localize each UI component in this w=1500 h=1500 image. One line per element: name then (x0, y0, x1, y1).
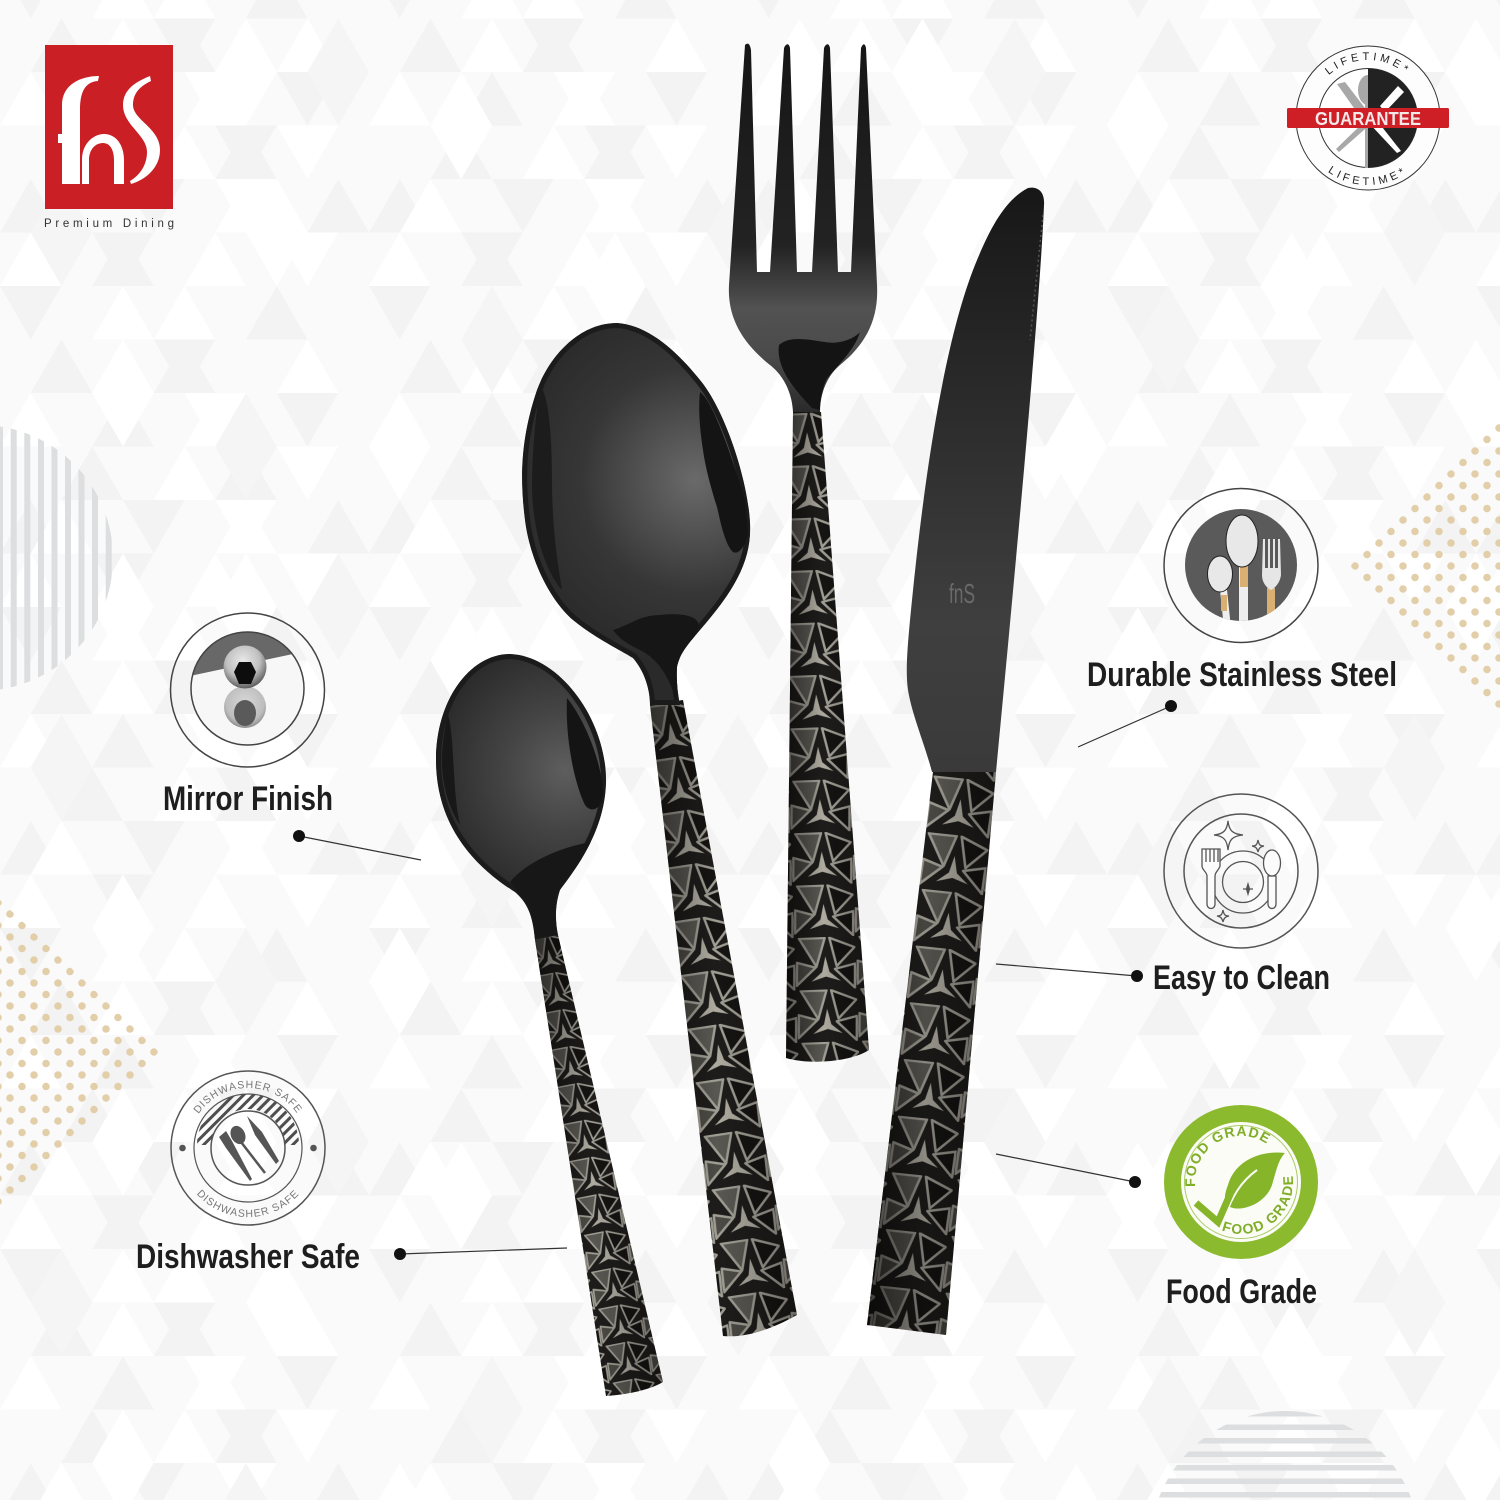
label: Durable Stainless Steel: Durable Stainless Steel (1087, 656, 1397, 694)
knife blade (907, 188, 1044, 772)
icon: food grade seal: FOOD GRADE (1222, 1176, 1294, 1234)
feature: food grade (996, 1105, 1318, 1311)
feature: mirror finish (163, 613, 421, 860)
decorative dots left (0, 900, 159, 1208)
fork (729, 44, 877, 1062)
leader line: mirror finish (293, 830, 421, 860)
small spoon bowl (436, 654, 606, 940)
badge: lifetime guarantee: LIFETIME* (1328, 166, 1402, 185)
icon: mirror ball (170, 613, 324, 767)
fork handle (786, 412, 869, 1062)
badge: lifetime guarantee: LIFETIME* (1324, 52, 1408, 75)
logo: FnS Premium Dining (44, 45, 174, 230)
icon: clean plate (1164, 794, 1318, 948)
feature: dishwasher safe (136, 1070, 567, 1276)
label: Easy to Clean: Easy to Clean (1153, 959, 1330, 997)
label: Food Grade: Food Grade (1166, 1273, 1317, 1311)
feature: easy to clean (996, 794, 1330, 997)
leader line: dishwasher safe (394, 1248, 567, 1260)
icon: dishwasher safe stamp (170, 1070, 326, 1226)
large spoon bowl (522, 323, 750, 705)
leader line: food grade (996, 1154, 1141, 1188)
icon: dishwasher safe stamp: DISHWASHER SAFE (193, 1080, 302, 1114)
badge: lifetime guarantee: GUARANTEE (1315, 108, 1421, 129)
leader line: durable (1078, 700, 1177, 747)
badge: lifetime guarantee (1287, 46, 1449, 190)
knife blade: fnS (949, 578, 975, 609)
knife (867, 188, 1044, 1335)
decorative stripes left (0, 420, 112, 700)
label: Mirror Finish: Mirror Finish (163, 780, 333, 818)
fork head (729, 44, 877, 412)
logo: FnS Premium Dining: Premium Dining (44, 218, 174, 230)
decorative dots right (1350, 422, 1500, 712)
feature: durable stainless steel (1078, 488, 1397, 747)
decorative stripes bottom (1150, 1411, 1420, 1498)
large spoon handle (650, 700, 797, 1336)
label: Dishwasher Safe: Dishwasher Safe (136, 1238, 360, 1276)
icon: food grade seal (1164, 1105, 1318, 1259)
knife handle (867, 772, 996, 1335)
icon: food grade seal: FOOD GRADE (1185, 1126, 1270, 1186)
leader line: easy to clean (996, 964, 1143, 982)
small spoon handle (535, 935, 663, 1396)
icon: dishwasher safe stamp: DISHWASHER SAFE (197, 1190, 298, 1218)
small spoon (436, 654, 663, 1396)
large spoon (522, 323, 797, 1336)
icon: stainless cutlery disc (1164, 488, 1318, 642)
